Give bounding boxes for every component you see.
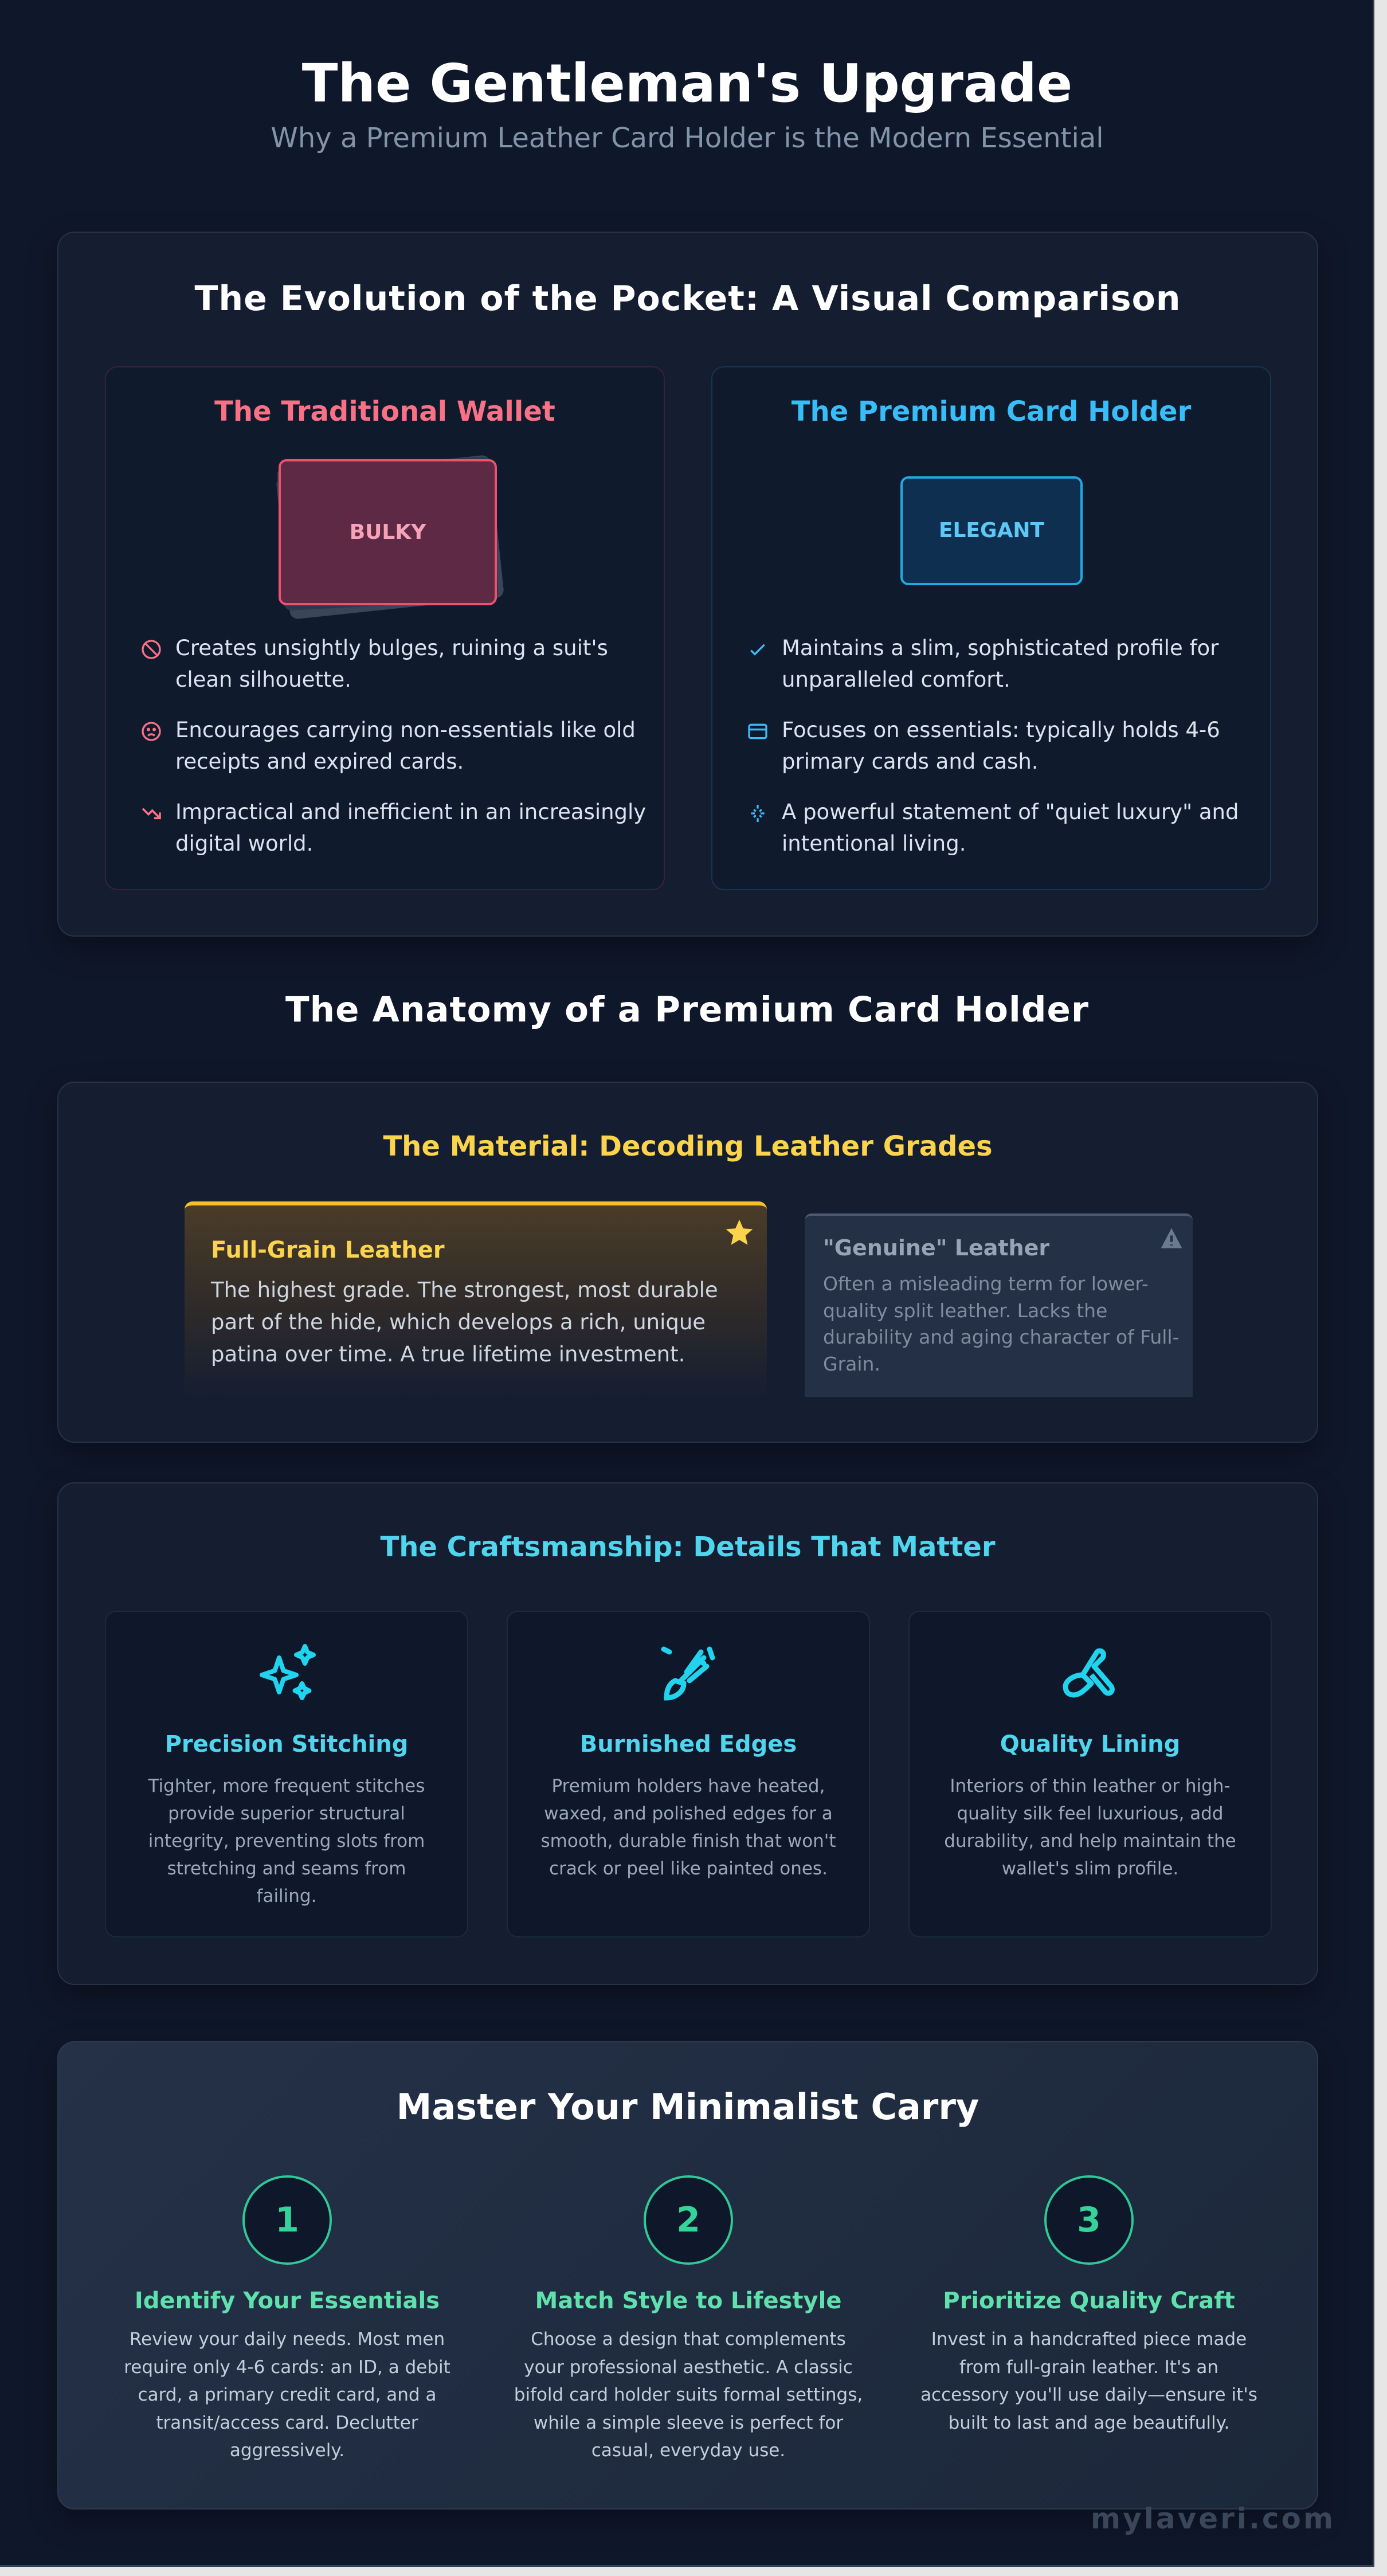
panel: material bbox=[57, 1082, 1318, 1443]
steps row: 1 bbox=[275, 2200, 299, 2240]
step 2 bbox=[514, 2175, 863, 2461]
icon: warning bbox=[1161, 1228, 1182, 1248]
bullet: non-essentials: Encourages carrying non-essentials like old receipts and expired cards. bbox=[175, 718, 636, 774]
text: genuine title: "Genuine" Leather bbox=[823, 1235, 1049, 1260]
heading: evolution of the pocket: The Evolution of the Pocket: A Visual Comparison bbox=[194, 279, 1181, 319]
steps row: Review your daily needs. Most men require only 4-6 cards: an ID, a debit card, a primary credit card, and a transit/access card. Declutter aggressively. bbox=[124, 2329, 450, 2461]
card: quality lining: Quality Lining bbox=[1000, 1731, 1180, 1757]
card: burnished edges: Premium holders have heated, waxed, and polished edges for a smooth, durable finish that won't crack or peel like painted ones. bbox=[541, 1776, 836, 1879]
card: traditional wallet bbox=[105, 366, 665, 890]
icon: bulky wallet stack bbox=[276, 455, 504, 619]
cards row bbox=[105, 1611, 1272, 1937]
steps row: Identify Your Essentials bbox=[135, 2288, 440, 2314]
bullet list: holder benefits bbox=[748, 636, 1239, 856]
icon: bulky wallet stack: BULKY bbox=[350, 520, 426, 544]
bullet list: wallet downsides bbox=[142, 636, 646, 856]
step 1 bbox=[124, 2175, 450, 2461]
title: The Gentleman's Upgrade bbox=[302, 53, 1072, 114]
text: full-grain title: Full-Grain Leather bbox=[211, 1237, 445, 1263]
steps row bbox=[124, 2175, 1257, 2461]
section heading: anatomy: The Anatomy of a Premium Card Holder bbox=[285, 989, 1089, 1030]
panel: master your minimalist carry bbox=[57, 2041, 1318, 2510]
icon: elegant card holder bbox=[900, 476, 1083, 585]
card: genuine leather bbox=[805, 1213, 1193, 1397]
card: premium card holder bbox=[711, 366, 1271, 890]
steps row: Prioritize Quality Craft bbox=[943, 2288, 1235, 2314]
text: genuine description: Often a misleading term for lower-quality split leather. Lacks the durability and aging character of Full-Grain. bbox=[823, 1273, 1179, 1375]
card: precision stitching: Precision Stitching bbox=[165, 1731, 408, 1757]
card: full-grain leather bbox=[185, 1201, 767, 1397]
bullet: slim profile: Maintains a slim, sophisticated profile for unparalleled comfort. bbox=[782, 636, 1218, 692]
card: precision stitching: Tighter, more frequent stitches provide superior structural integrity, preventing slots from stretching and seams from failing. bbox=[148, 1776, 425, 1906]
steps row: 2 bbox=[676, 2200, 700, 2240]
card: burnished edges: Burnished Edges bbox=[580, 1731, 797, 1757]
bullet: quiet luxury: A powerful statement of "quiet luxury" and intentional living. bbox=[782, 800, 1239, 856]
panel: craftsmanship bbox=[57, 1482, 1318, 1985]
step 3 bbox=[920, 2175, 1257, 2433]
heading: premium card holder: The Premium Card Holder bbox=[792, 396, 1191, 428]
steps row: Match Style to Lifestyle bbox=[535, 2288, 841, 2314]
heading: craftsmanship: The Craftsmanship: Details That Matter bbox=[380, 1531, 996, 1563]
bullet: bulges: Creates unsightly bulges, ruining a suit's clean silhouette. bbox=[175, 636, 608, 692]
subtitle: Why a Premium Leather Card Holder is the Modern Essential bbox=[271, 122, 1104, 154]
card: burnished edges bbox=[507, 1611, 870, 1937]
icon: sparkles bbox=[260, 1644, 316, 1700]
bullet: impractical: Impractical and inefficient in an increasingly digital world. bbox=[175, 800, 646, 856]
heading: leather grades: The Material: Decoding Leather Grades bbox=[383, 1130, 993, 1162]
icon: brush bbox=[661, 1646, 715, 1700]
icon: star bbox=[726, 1220, 753, 1245]
bullet: essentials: Focuses on essentials: typically holds 4-6 primary cards and cash. bbox=[782, 718, 1220, 774]
panel: visual comparison bbox=[57, 232, 1318, 937]
steps row: Choose a design that complements your professional aesthetic. A classic bifold card holder suits formal settings, while a simple sleeve is perfect for casual, everyday use. bbox=[514, 2329, 863, 2461]
card: quality lining: Interiors of thin leather or high-quality silk feel luxurious, add durability, and help maintain the wallet's slim profile. bbox=[944, 1776, 1236, 1879]
icon: elegant card holder: ELEGANT bbox=[939, 519, 1044, 542]
watermark: mylaveri.com bbox=[1091, 2502, 1335, 2535]
heading: minimalist carry: Master Your Minimalist Carry bbox=[397, 2086, 979, 2128]
card: precision stitching bbox=[105, 1611, 468, 1937]
steps row: Invest in a handcrafted piece made from full-grain leather. It's an accessory you'll use daily—ensure it's built to last and age beautifully. bbox=[920, 2329, 1257, 2433]
text: full-grain description: The highest grade. The strongest, most durable part of the hide, which develops a rich, unique patina over time. A true lifetime investment. bbox=[211, 1278, 718, 1367]
card: quality lining bbox=[908, 1611, 1272, 1937]
icon: ribbon bbox=[1063, 1649, 1115, 1698]
heading: traditional wallet: The Traditional Wallet bbox=[214, 396, 555, 428]
steps row: 3 bbox=[1077, 2200, 1101, 2240]
